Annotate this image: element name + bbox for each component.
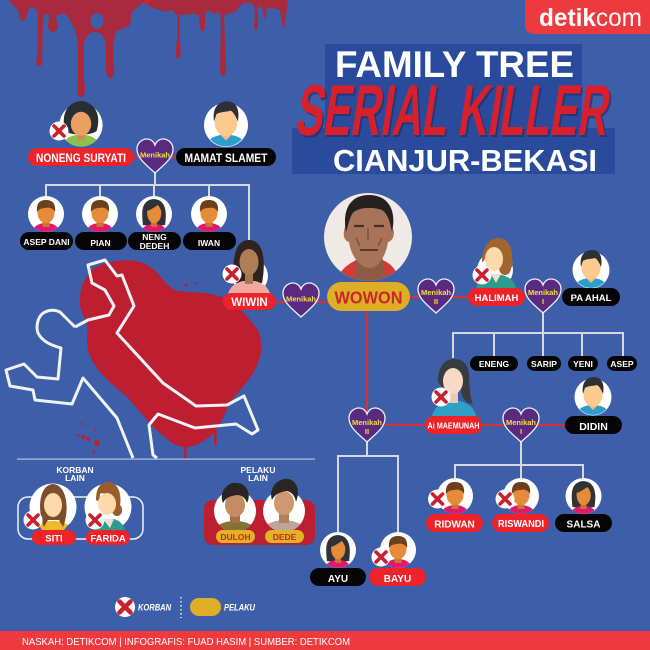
Wowon photo: [324, 193, 412, 281]
chalk body outline: [6, 260, 258, 458]
panel: korban lain: FARIDA: [90, 534, 126, 544]
blood drips: [8, 0, 288, 97]
children of Wowon and Ai Maemunah: BAYU: [384, 574, 411, 585]
children of Halimah: ENENG: [479, 359, 509, 369]
panel: pelaku lain: PELAKU: [241, 465, 275, 475]
marriage heart: lower II: Menikah: [352, 418, 382, 427]
children of Wowon and Ai Maemunah: [310, 532, 426, 586]
children of Noneng: IWAN: [198, 238, 220, 248]
Wiwin: [222, 240, 319, 317]
panel: korban lain: KORBAN: [56, 465, 94, 475]
panel: pelaku lain: DEDE: [273, 532, 297, 542]
Wowon label: [327, 282, 410, 311]
children of Ai Maemunah and Didin: SALSA: [567, 520, 600, 530]
children of Noneng: ASEP DANI: [23, 237, 70, 247]
couple: Noneng and Mamat: NONENG SURYATI: [36, 153, 126, 165]
children of Halimah: ASEP: [610, 359, 634, 369]
couple: Noneng and Mamat: [28, 101, 276, 173]
couple: Noneng and Mamat: MAMAT SLAMET: [184, 153, 268, 165]
marriage heart: Halimah and Pa Ahal: I: [542, 297, 544, 306]
Didin: DIDIN: [579, 421, 608, 433]
marriage heart: lower II: [349, 408, 385, 442]
Wiwin: Menikah: [286, 294, 316, 304]
marriage heart: Halimah and Pa Ahal: Menikah: [528, 288, 558, 297]
children of Halimah: YENI: [573, 359, 593, 369]
separator: [17, 458, 315, 460]
children of Noneng: NENG: [142, 232, 167, 242]
children of Noneng: PIAN: [90, 238, 111, 248]
title: [291, 44, 618, 178]
marriage heart: lower II: II: [365, 427, 369, 436]
Wowon label: WOWON: [334, 288, 402, 308]
Halimah: HALIMAH: [475, 293, 519, 304]
panel: korban lain: LAIN: [65, 473, 85, 483]
Pa Ahal: PA AHAL: [571, 293, 612, 304]
Didin: [565, 377, 622, 434]
children of Wowon and Ai Maemunah: AYU: [328, 574, 348, 585]
panel: pelaku lain: [204, 465, 315, 546]
marriage heart: Halimah and Pa Ahal: [525, 279, 561, 313]
children of Ai Maemunah and Didin: [426, 478, 612, 532]
marriage heart: lower I: I: [520, 427, 522, 436]
panel: pelaku lain: LAIN: [248, 473, 268, 483]
Ai Maemunah: Ai MAEMUNAH: [428, 420, 480, 430]
legend: [115, 597, 255, 618]
panel: korban lain: [18, 465, 143, 545]
children of Noneng: [20, 196, 236, 251]
children of Ai Maemunah and Didin: RIDWAN: [434, 520, 475, 530]
legend: PELAKU: [224, 602, 255, 612]
marriage heart: Wowon and Halimah: II: [434, 297, 438, 306]
Ai Maemunah: [425, 359, 482, 434]
children of Halimah: [470, 356, 637, 371]
footer: NASKAH: DETIKCOM | INFOGRAFIS: FUAD HASIM | SUMBER: DETIKCOM: [22, 636, 350, 648]
header: detikcom logo: detikcom: [539, 4, 642, 32]
legend: KORBAN: [138, 602, 171, 612]
marriage heart: Wowon and Halimah: [418, 279, 454, 313]
blood blob: [77, 260, 261, 458]
Pa Ahal: [562, 250, 620, 306]
header: detikcom logo: [525, 0, 650, 34]
title: FAMILY TREE: [335, 44, 574, 85]
footer: [0, 631, 650, 650]
title: CIANJUR-BEKASI: [333, 143, 597, 178]
Halimah: [468, 238, 525, 306]
marriage heart: Wowon and Halimah: Menikah: [421, 288, 451, 297]
children of Ai Maemunah and Didin: RISWANDI: [498, 519, 544, 530]
couple: Noneng and Mamat: Menikah: [140, 150, 170, 160]
marriage heart: lower I: Menikah: [506, 418, 536, 427]
marriage heart: lower I: [503, 408, 539, 442]
Wiwin: WIWIN: [231, 297, 268, 309]
panel: pelaku lain: DULOH: [220, 532, 251, 542]
children of Halimah: SARIP: [531, 359, 557, 369]
panel: korban lain: SITI: [45, 534, 63, 544]
children of Noneng: DEDEH: [140, 241, 169, 251]
connector lines: [46, 157, 623, 532]
